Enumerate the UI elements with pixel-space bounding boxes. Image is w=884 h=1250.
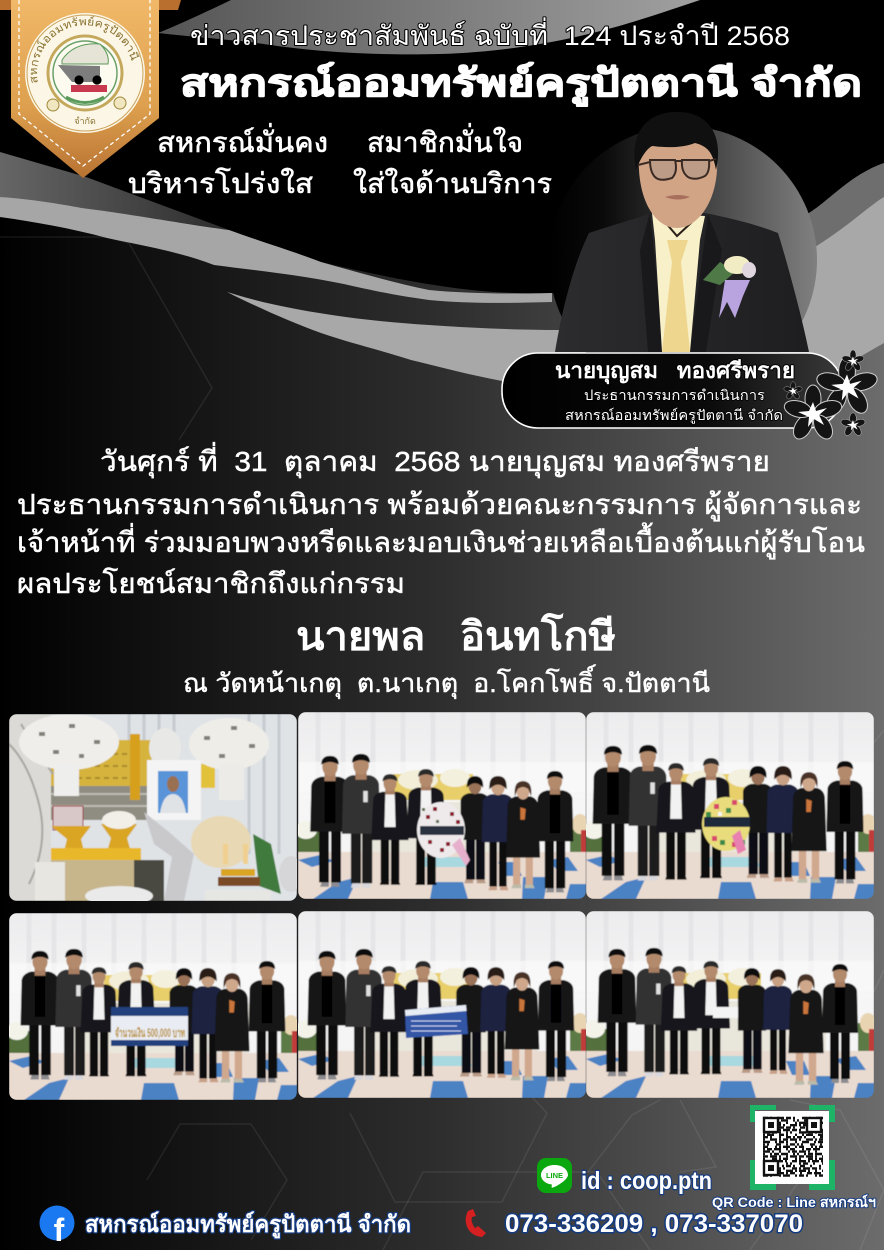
icon: Facebook [40, 1206, 74, 1248]
photo 3: wreath with colourful flowers [583, 712, 876, 899]
photo 6: envelope handover [583, 911, 876, 1098]
body paragraph: ผลประโยชน์สมาชิกถึงแก่กรรม [17, 567, 405, 599]
slogan: สหกรณ์มั่นคง [157, 123, 328, 158]
glasses [638, 159, 716, 180]
title: สหกรณ์ออมทรัพย์ครูปัตตานี จำกัด [180, 62, 862, 107]
icon: LINE: LINE [546, 1171, 563, 1180]
black upper background [0, 0, 884, 293]
icon: frangipani flowers [782, 350, 879, 442]
QR corner marks [750, 1105, 835, 1190]
donation board [405, 1005, 468, 1038]
icon: telephone [466, 1209, 486, 1237]
body paragraph: ประธานกรรมการดำเนินการ พร้อมด้วยคณะกรรมการ ผู้จัดการและ [17, 489, 862, 522]
donation board [111, 1007, 188, 1046]
telephone numbers: 073-336209 , 073-337070 [505, 1210, 803, 1238]
name plate [502, 353, 843, 428]
newsletter issue line: ข่าวสารประชาสัมพันธ์ ฉบับที่ 124 ประจำปี 2568 [190, 17, 790, 51]
lapels [640, 212, 722, 352]
donation board: จำนวนเงิน 500,000 บาท [115, 1026, 185, 1040]
QR finder patterns [764, 1118, 821, 1175]
body paragraph: เจ้าหน้าที่ ร่วมมอบพวงหรีดและมอบเงินช่วยเหลือเบื้องต้นแก่ผู้รับโอน [17, 522, 865, 560]
jacket [555, 213, 809, 352]
head [639, 125, 717, 228]
envelope [713, 1007, 738, 1018]
wreath [417, 802, 470, 866]
QR caption: QR Code : Line สหกรณ์ฯ [712, 1194, 876, 1210]
photo 4: donation board 500,000 baht [6, 913, 299, 1100]
body paragraph [17, 442, 865, 599]
slogan [128, 123, 552, 199]
QR modules [763, 1118, 823, 1176]
co-op seal [25, 13, 145, 133]
ribbon with logo [0, 0, 181, 178]
Facebook page name: สหกรณ์ออมทรัพย์ครูปัตตานี จำกัด [85, 1211, 411, 1239]
QR code [750, 1105, 835, 1190]
boutonniere [703, 256, 756, 318]
mouth [665, 195, 690, 200]
top grey swoosh [158, 0, 700, 54]
slogan: บริหารโปร่งใส [128, 167, 313, 199]
slogan: ใส่ใจด้านบริการ [353, 167, 552, 199]
deceased member name: นายพล อินทโกษี [296, 613, 616, 659]
hair [634, 112, 718, 170]
photo 5: donation board [295, 911, 588, 1098]
LINE id: id : coop.ptn [581, 1167, 712, 1195]
venue line: ณ วัดหน้าเกตุ ต.นาเกตุ อ.โคกโพธิ์ จ.ปัตตานี [183, 664, 710, 699]
collar shadow [665, 222, 692, 236]
ribbon body [11, 0, 159, 178]
organisation name: สหกรณ์ออมทรัพย์ครูปัตตานี จำกัด [565, 407, 783, 424]
light grey swoosh band [0, 197, 552, 303]
photo 1: memorial altar [9, 714, 303, 906]
chairman role: ประธานกรรมการดำเนินการ [584, 387, 765, 403]
plate pill [502, 353, 843, 428]
chairman name: นายบุญสม ทองศรีพราย [555, 358, 795, 385]
slogan: สมาชิกมั่นใจ [367, 123, 523, 158]
icon: LINE [537, 1158, 572, 1193]
right dark grey swoosh [700, 163, 884, 270]
dark grey wedge swoosh [0, 152, 229, 230]
body paragraph: วันศุกร์ ที่ 31 ตุลาคม 2568 นายบุญสม ทองศรีพราย [100, 442, 770, 479]
wreath [702, 797, 750, 854]
shirt [652, 213, 705, 352]
photo 2: wreath with white and red flowers [295, 712, 588, 899]
co-op seal: จำกัด [74, 116, 96, 126]
icon: Facebook: f [54, 1212, 65, 1248]
co-op seal: สหกรณ์ออมทรัพย์ครูปัตตานี [30, 16, 140, 83]
tie [662, 240, 690, 352]
portrait: chairman [555, 112, 809, 352]
ribbon fold [0, 0, 181, 10]
lower light grey swoosh [227, 197, 884, 400]
portrait backdrop circle [549, 126, 817, 394]
